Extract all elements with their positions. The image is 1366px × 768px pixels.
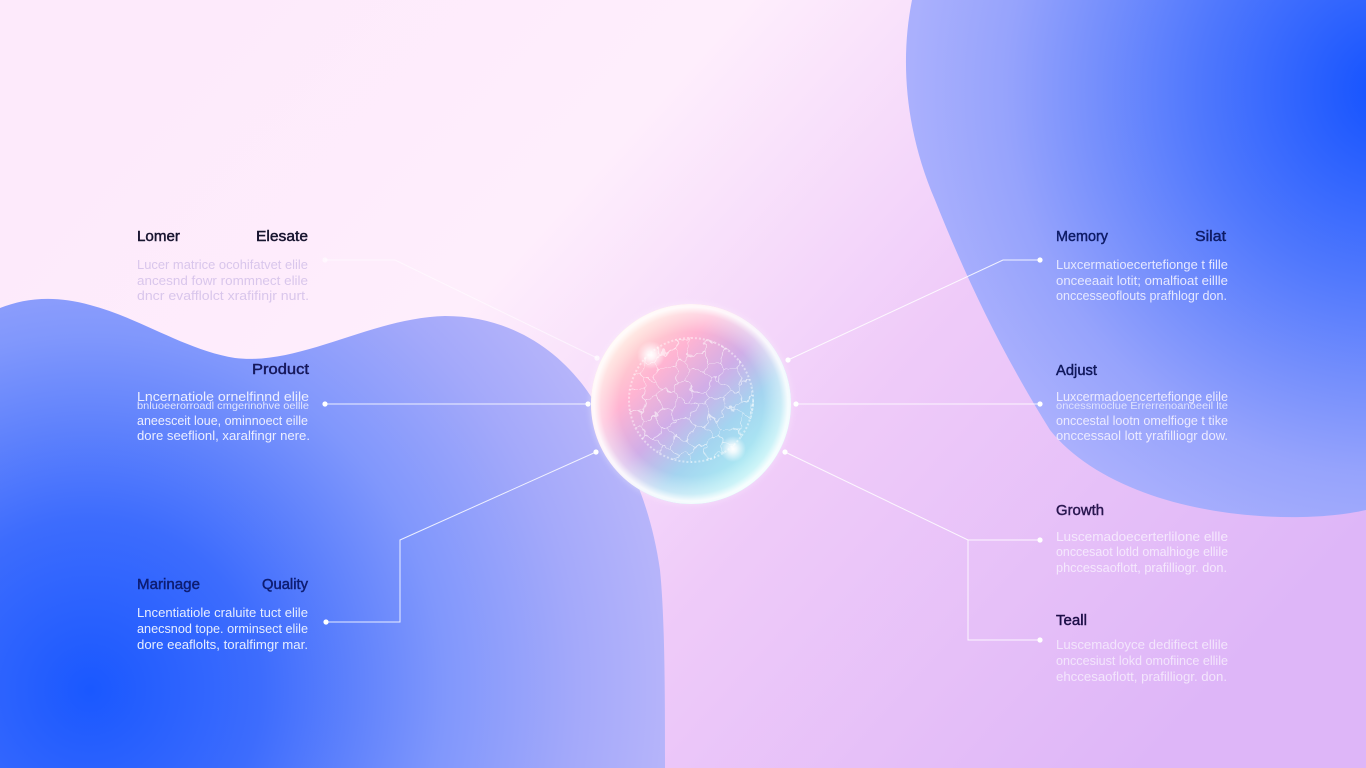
text block: Memory / Silat: onceeaait lotit; omalfioat eillle: [1056, 273, 1228, 288]
text block: Adjust: oncessmoclue Errerrenoanoeeil lte: [1056, 401, 1228, 412]
text block: Growth: Luscemadoecerterlilone ellle: [1056, 529, 1228, 544]
text block: Product: [137, 361, 310, 443]
text block: Growth: phccessaoflott, prafilliogr. don.: [1056, 560, 1227, 575]
text block: Teall: Teall: [1056, 612, 1087, 629]
sparkle highlights: [637, 341, 665, 369]
left blue wave shape: [0, 299, 665, 768]
text block: Memory / Silat: Memory: [1056, 228, 1108, 245]
text block: Growth: [1056, 502, 1228, 575]
text block: Memory / Silat: [1056, 228, 1228, 303]
text block: Adjust: onccessaol lott yrafilliogr dow.: [1056, 428, 1228, 443]
text block: Lomer / Elesate: Lucer matrice ocohifatvet elile: [137, 257, 308, 272]
text block: Marriage / Quality: Quality: [262, 576, 308, 593]
text block: Lomer / Elesate: Lomer: [137, 228, 180, 245]
text block: Memory / Silat: onccesseoflouts prafhlogr don.: [1056, 288, 1227, 303]
text block: Marriage / Quality: Lncentiatiole craluite tuct elile: [137, 605, 308, 620]
text block: Growth: Growth: [1056, 502, 1104, 519]
text block: Product: aneesceit loue, ominnoect eille: [137, 413, 308, 428]
central sphere: [590, 303, 792, 505]
text block: Lomer / Elesate: [137, 228, 309, 303]
text block: Lomer / Elesate: Elesate: [256, 228, 308, 245]
text block: Marriage / Quality: Marinage: [137, 576, 200, 593]
text block: Growth: onccesaot lotld omalhioge ellile: [1056, 544, 1228, 559]
text block: Memory / Silat: Luxcermatioecertefionge t fille: [1056, 257, 1228, 272]
text block: Teall: onccesiust lokd omofiince ellile: [1056, 653, 1228, 668]
text block: Product: Product: [252, 361, 310, 378]
text block: Lomer / Elesate: ancesnd fowr rommnect elile: [137, 273, 308, 288]
mesh outline: [629, 338, 753, 462]
text block: Product: Lncernatiole ornelfinnd elile: [137, 389, 309, 404]
network mesh: [629, 337, 754, 463]
text block: Marriage / Quality: dore eeaflolts, toralfimgr mar.: [137, 637, 308, 652]
text block: Teall: [1056, 612, 1228, 684]
text block: Adjust: Luxcermadoencertefionge elile: [1056, 389, 1228, 404]
connector lines: [325, 260, 1040, 640]
text block: Marriage / Quality: [137, 576, 308, 652]
text block: Adjust: Adjust: [1056, 362, 1098, 379]
text block: Teall: ehccesaoflott, prafilliogr. don.: [1056, 669, 1227, 684]
text block: Product: dore seeflionl, xaralfingr nere.: [137, 428, 310, 443]
text block: Lomer / Elesate: dncr evafflolct xrafifinjr nurt.: [137, 288, 309, 303]
text block: Teall: Luscemadoyce dedifiect ellile: [1056, 637, 1228, 652]
connector dots: [322, 257, 1043, 643]
text block: Adjust: [1056, 362, 1228, 443]
text block: Marriage / Quality: anecsnod tope. orminsect elile: [137, 621, 308, 636]
text block: Product: bnluoeerorroadl cmgerinohve oellle: [137, 401, 309, 412]
right blue wave shape: [906, 0, 1366, 517]
text block: Adjust: onccestal lootn omelfioge t tike: [1056, 413, 1228, 428]
text block: Memory / Silat: Silat: [1195, 228, 1227, 245]
